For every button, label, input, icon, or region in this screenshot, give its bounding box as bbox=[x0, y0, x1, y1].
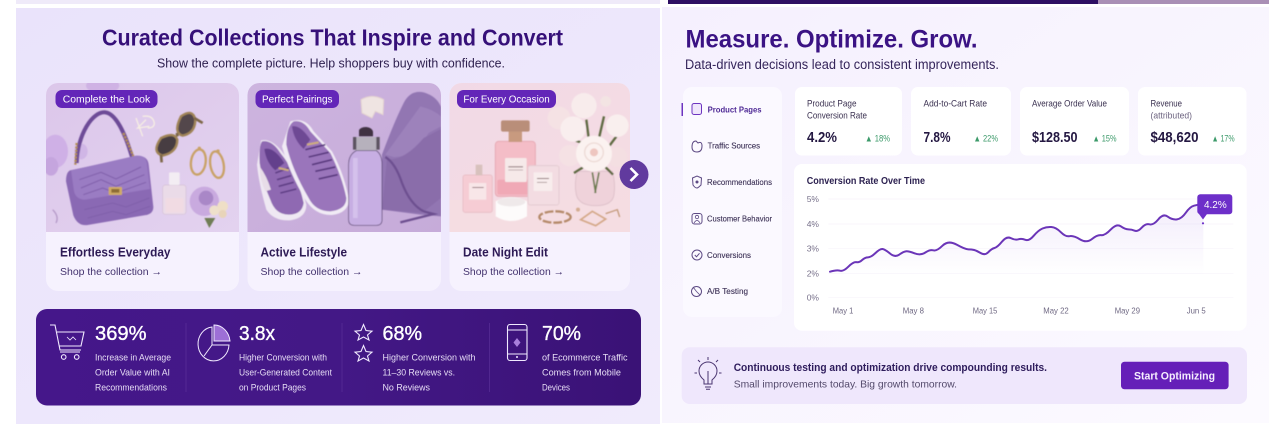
active indicator bbox=[682, 103, 683, 116]
KPI card: Add-to-Cart Rate: 7.8% bbox=[924, 130, 951, 146]
x axis labels: May 22 bbox=[1043, 305, 1069, 315]
stat: 3.8x bbox=[198, 323, 332, 394]
card link: Shop the collection → bbox=[463, 266, 564, 278]
description: Comes from Mobile bbox=[542, 368, 621, 378]
x axis labels: May 15 bbox=[973, 305, 998, 315]
card: Date Night Edit bbox=[449, 83, 630, 291]
arrow: next carousel button bbox=[620, 160, 648, 189]
card link: Shop the collection → bbox=[260, 266, 362, 278]
icon: mobile phone bbox=[508, 324, 527, 360]
y axis labels bbox=[807, 194, 819, 303]
badge: Complete the Look bbox=[56, 90, 158, 108]
nav: Product Pages: Product Pages bbox=[708, 104, 762, 114]
description: User-Generated Content bbox=[239, 368, 332, 378]
description: on Product Pages bbox=[239, 382, 306, 394]
KPI card: Product Page Conversion Rate: ▲ 18% bbox=[865, 134, 890, 144]
subtitle: Show the complete picture. Help shoppers buy with confidence. bbox=[157, 56, 505, 70]
card link: Shop the collection → bbox=[60, 266, 162, 278]
nav: Conversions: Conversions bbox=[707, 250, 751, 260]
KPI card: Average Order Value bbox=[1020, 87, 1129, 156]
nav: Traffic Sources: Traffic Sources bbox=[708, 140, 760, 150]
nav: Product Pages bbox=[692, 104, 762, 114]
description bbox=[542, 352, 628, 394]
callout heading: Continuous testing and optimization drive compounding results. bbox=[734, 362, 1047, 374]
KPI card: Revenue bbox=[1138, 87, 1246, 156]
sidebar navigation bbox=[682, 87, 782, 317]
KPI card: Product Page Conversion Rate: Conversion Rate bbox=[807, 111, 867, 121]
chart title: Conversion Rate Over Time bbox=[807, 176, 925, 187]
icon: shopping cart bbox=[50, 325, 84, 359]
top strip: previous section right bbox=[668, 0, 1269, 4]
KPI card: Average Order Value: $128.50 bbox=[1032, 130, 1078, 146]
y axis labels: 2% bbox=[807, 268, 819, 278]
x axis labels bbox=[833, 305, 1206, 315]
KPI card: Revenue: (attributed) bbox=[1150, 111, 1192, 121]
panel: measure optimize grow bbox=[662, 7, 1269, 423]
callout: 4.2% bbox=[1197, 194, 1232, 224]
KPI card: Revenue: $48,620 bbox=[1150, 130, 1198, 146]
icon: stars bbox=[355, 324, 372, 361]
KPI card: Add-to-Cart Rate: Add-to-Cart Rate bbox=[924, 98, 987, 108]
stats band bbox=[36, 309, 641, 406]
callout text: Small improvements today. Big growth tomorrow. bbox=[734, 379, 957, 391]
description: Increase in Average bbox=[95, 352, 171, 364]
y axis labels: 5% bbox=[807, 194, 819, 204]
y axis labels: 0% bbox=[807, 293, 819, 303]
x axis labels: May 1 bbox=[833, 305, 854, 315]
description: Higher Conversion with bbox=[382, 352, 476, 364]
icon: pie chart bbox=[198, 325, 230, 361]
card title: Effortless Everyday bbox=[60, 244, 171, 260]
line chart card: conversion rate over time bbox=[794, 164, 1247, 331]
card: Active Lifestyle bbox=[247, 83, 441, 291]
button: Start Optimizing bbox=[1121, 362, 1229, 389]
value: 70% bbox=[542, 323, 581, 345]
subtitle: Data-driven decisions lead to consistent improvements. bbox=[685, 57, 999, 72]
card title: Date Night Edit bbox=[463, 244, 549, 260]
badge: Perfect Pairings bbox=[256, 90, 339, 108]
y axis labels: 3% bbox=[807, 244, 819, 254]
x axis labels: May 8 bbox=[903, 305, 924, 315]
description: Order Value with AI bbox=[95, 368, 170, 378]
description: Recommendations bbox=[95, 382, 167, 394]
KPI card: Revenue: Revenue bbox=[1150, 98, 1182, 108]
callout bar: continuous testing bbox=[682, 347, 1247, 404]
nav: A/B Testing bbox=[692, 286, 748, 296]
product image: bag and accessories bbox=[43, 78, 239, 232]
stat: 68% bbox=[355, 323, 476, 394]
card: Effortless Everyday bbox=[43, 78, 239, 291]
description: Higher Conversion with bbox=[239, 352, 327, 364]
badge: Perfect Pairings: Perfect Pairings bbox=[262, 94, 332, 106]
x axis labels: May 29 bbox=[1115, 305, 1140, 315]
KPI card: Product Page Conversion Rate: 4.2% bbox=[807, 130, 837, 146]
KPI card: Revenue: ▲ 17% bbox=[1212, 134, 1235, 144]
description: 11–30 Reviews vs. bbox=[382, 368, 455, 378]
description bbox=[382, 352, 476, 394]
panel: curated collections bbox=[16, 8, 660, 424]
description bbox=[239, 352, 332, 394]
description: No Reviews bbox=[382, 382, 430, 394]
badge: For Every Occasion bbox=[457, 90, 556, 108]
stat: 70% bbox=[508, 323, 628, 394]
KPI card: Add-to-Cart Rate: ▲ 22% bbox=[974, 134, 998, 144]
KPI card: Product Page Conversion Rate bbox=[795, 87, 902, 156]
description bbox=[95, 352, 171, 394]
description: Devices bbox=[542, 382, 570, 394]
KPI card: Add-to-Cart Rate bbox=[911, 87, 1011, 156]
top strip: previous section left bbox=[16, 0, 660, 4]
x axis labels: Jun 5 bbox=[1187, 305, 1206, 315]
callout: 4.2%: 4.2% bbox=[1204, 199, 1227, 211]
KPI card: Average Order Value: Average Order Value bbox=[1032, 98, 1107, 108]
nav: A/B Testing: A/B Testing bbox=[707, 286, 748, 296]
value: 369% bbox=[95, 323, 147, 345]
stat: 369% bbox=[50, 323, 171, 394]
icon: light bulb bbox=[694, 357, 722, 389]
KPI card: Product Page Conversion Rate: Product Page bbox=[807, 98, 857, 108]
title: Curated Collections That Inspire and Convert bbox=[102, 24, 563, 50]
nav: Recommendations: Recommendations bbox=[707, 177, 772, 187]
value: 3.8x bbox=[239, 323, 275, 345]
KPI card: Average Order Value: ▲ 15% bbox=[1092, 134, 1116, 144]
card title: Active Lifestyle bbox=[260, 244, 347, 260]
product image: perfume and flowers bbox=[449, 83, 630, 232]
description: of Ecommerce Traffic bbox=[542, 352, 628, 364]
y axis labels: 4% bbox=[807, 219, 819, 229]
nav: Customer Behavior: Customer Behavior bbox=[707, 214, 772, 224]
badge: For Every Occasion: For Every Occasion bbox=[463, 94, 550, 106]
badge: Complete the Look: Complete the Look bbox=[63, 94, 151, 106]
nav: Recommendations bbox=[692, 176, 772, 188]
product image: shoes, bottle, mat bbox=[247, 83, 441, 232]
value: 68% bbox=[382, 323, 422, 345]
title: Measure. Optimize. Grow. bbox=[686, 26, 978, 54]
button: Start Optimizing: Start Optimizing bbox=[1134, 370, 1215, 382]
plot line bbox=[828, 199, 1233, 298]
nav: Traffic Sources bbox=[692, 140, 760, 152]
nav: Conversions bbox=[692, 250, 751, 260]
